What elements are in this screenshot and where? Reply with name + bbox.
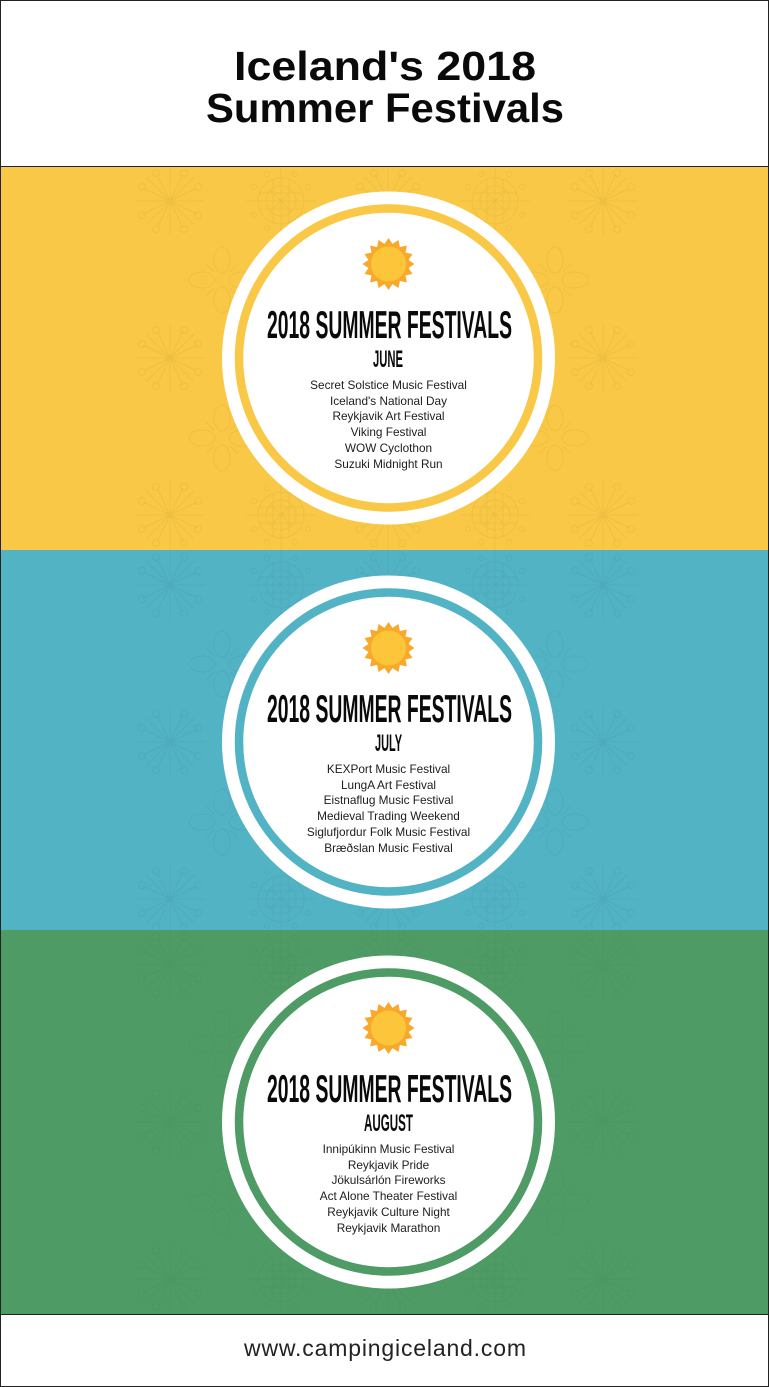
title: Summer Festivals [206, 85, 564, 131]
July festival list: Siglufjordur Folk Music Festival [307, 825, 470, 839]
July festival list: LungA Art Festival [341, 778, 436, 792]
August festival list [320, 1142, 457, 1235]
August festival list: Reykjavik Marathon [337, 1221, 440, 1235]
panel: June [0, 166, 769, 550]
panel: August: AUGUST [364, 1110, 413, 1137]
July festival list: Eistnaflug Music Festival [324, 793, 453, 807]
panel: June: JUNE [373, 346, 403, 373]
June heading: 2018 SUMMER FESTIVALS [267, 304, 512, 347]
July festival list: KEXPort Music Festival [327, 762, 450, 776]
icon: June sun [362, 238, 414, 290]
June festival list: Iceland's National Day [330, 394, 447, 408]
June festival list: Viking Festival [351, 425, 426, 439]
June festival list: Secret Solstice Music Festival [310, 378, 467, 392]
July festival list: Bræðslan Music Festival [324, 841, 453, 855]
August festival list: Reykjavik Culture Night [327, 1205, 451, 1219]
August heading: 2018 SUMMER FESTIVALS [267, 1068, 512, 1111]
July festival list [307, 762, 470, 855]
July background band [0, 550, 769, 930]
June background pattern [135, 166, 638, 550]
footer website: www.campingiceland.com [243, 1335, 526, 1361]
July circle badge [222, 576, 555, 908]
panel: July: JULY [375, 730, 402, 757]
title [206, 43, 564, 131]
June festival list [310, 378, 467, 471]
August festival list: Act Alone Theater Festival [320, 1189, 457, 1203]
July heading: 2018 SUMMER FESTIVALS [267, 688, 512, 731]
August background band [0, 930, 769, 1314]
August festival list: Innipúkinn Music Festival [323, 1142, 454, 1156]
icon: July sun [362, 622, 414, 674]
panel: August [0, 930, 769, 1314]
June festival list: Suzuki Midnight Run [334, 457, 443, 471]
August background pattern [135, 930, 638, 1314]
August circle badge [222, 956, 555, 1288]
August festival list: Reykjavik Pride [348, 1158, 430, 1172]
June festival list: WOW Cyclothon [345, 441, 432, 455]
June circle badge [222, 192, 555, 524]
July background pattern [135, 550, 638, 934]
June festival list: Reykjavik Art Festival [332, 409, 445, 423]
June background band [0, 166, 769, 550]
July festival list: Medieval Trading Weekend [317, 809, 460, 823]
title: Iceland's 2018 [234, 43, 536, 89]
August festival list: Jökulsárlón Fireworks [331, 1173, 446, 1187]
icon: August sun [362, 1002, 414, 1054]
panel: July [0, 550, 769, 934]
